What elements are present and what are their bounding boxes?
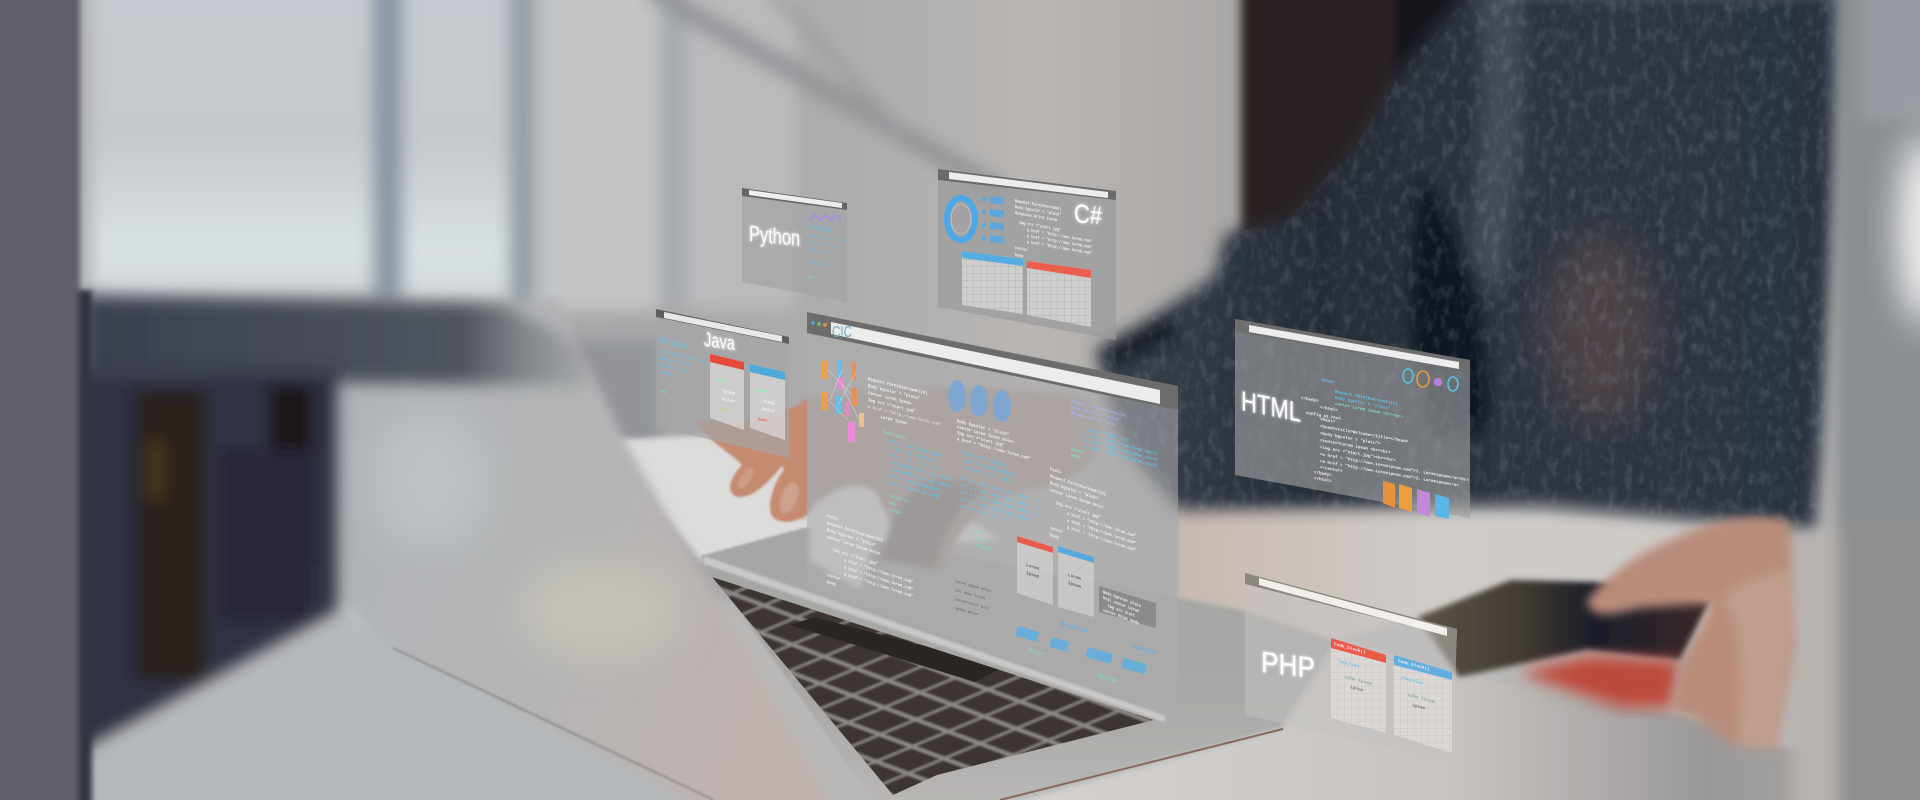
code block green: run(); <box>975 536 990 545</box>
left dark window frame <box>0 0 92 800</box>
donut chart <box>947 198 975 240</box>
right hand <box>1587 517 1795 750</box>
red card: echo lorem <box>1345 674 1372 687</box>
small code block grey: consectetur elit <box>955 597 989 612</box>
red card <box>1331 638 1386 733</box>
sweater <box>1090 0 1850 540</box>
table surface front <box>1000 640 1830 800</box>
red card: Amet <box>720 408 730 414</box>
small code block grey: Lorem ipsum dolor <box>955 579 992 594</box>
bottom labels: Research <box>1058 620 1088 635</box>
note box <box>1099 586 1156 628</box>
code block white bottom left: a href = "http://www.lorem.com" <box>844 558 913 586</box>
code snippet: end <box>808 275 814 281</box>
red table card <box>1027 261 1091 327</box>
code: <a href = "http://www.Loremipsum.com">1. Loremipsum</a><br> <box>1320 452 1469 483</box>
file icons <box>1383 481 1449 519</box>
code block top left <box>868 377 942 435</box>
C# label: C# <box>1074 198 1102 231</box>
code block white bottom left: body <box>827 580 836 588</box>
address bar <box>831 322 1160 404</box>
browser bar <box>1245 573 1457 638</box>
code snippet: String s = new <box>660 363 689 375</box>
red table card: Lorem <box>1026 562 1039 572</box>
code snippet <box>808 223 849 287</box>
window and wall background <box>0 0 1300 640</box>
small code block grey: sit amet lorem <box>955 588 986 602</box>
code block cyan center: var a = new Lorem(item, value, n) <box>960 476 1038 504</box>
code snippet: for item in list: <box>808 240 843 251</box>
right bright glow <box>1899 135 1920 325</box>
code snippet: print(item) <box>808 247 830 256</box>
red table card <box>1017 536 1053 605</box>
blue card: function <box>1402 675 1423 687</box>
note box: Img src start <box>1108 605 1136 619</box>
table surface right <box>1178 500 1800 640</box>
code block violet: center <box>1071 448 1085 456</box>
address text: CIC <box>832 324 852 341</box>
laptop lid <box>337 296 838 800</box>
red card: ipsum <box>1350 684 1363 694</box>
right foreground blur <box>1792 0 1920 800</box>
bottom edge line of lid <box>393 648 714 800</box>
code block violet <box>1071 399 1158 482</box>
code block cyan center: var b = new Lorem(item, value, n) <box>960 483 1038 511</box>
code block white bottom left: Request.Form(Username)[0] <box>827 521 883 544</box>
code block white bottom left: a href = "http://www.lorem.com" <box>844 565 913 593</box>
cyan code: Request.Form(Username)[0] <box>1335 390 1398 407</box>
code snippet: public void run() <box>660 356 695 369</box>
red card: Code_block() <box>1334 641 1366 656</box>
laptop front edge <box>1000 729 1283 800</box>
code block cyan center: print("lorem", name) <box>965 466 1013 485</box>
code block white right: a href = "http://www.lorem.com" <box>1067 511 1136 540</box>
blue card: Ipsum <box>762 398 775 407</box>
code block cyan left: item.pop(value, key, name) <box>888 466 950 489</box>
blue table card: Lorem <box>1068 572 1081 582</box>
code block green: stop(); <box>975 543 992 553</box>
code block white bottom left <box>827 514 913 613</box>
code block center: center Lorem Ipsum dolor <box>957 425 1014 445</box>
code block cyan left: for (i = 0; i < n; i++) <box>888 452 943 473</box>
code block violet: img src ="start.jpg" <box>1085 426 1129 444</box>
code: </body> <box>1314 470 1332 478</box>
code block cyan left <box>883 430 952 531</box>
code: <head><title>Welcome</title></head> <box>1320 424 1409 445</box>
blue table card <box>1058 546 1094 617</box>
small code block grey: ipsum dolor <box>955 606 979 618</box>
code block white right: center Lorem Ipsum dolor <box>1050 488 1104 511</box>
code block green <box>970 527 992 553</box>
hazy lid reflections <box>370 410 680 660</box>
code block: Request.Form(Username) <box>1015 199 1061 212</box>
code block: Img src ="start.jpg" <box>1019 220 1061 233</box>
code block violet: a href = "http://www.lorem.com/2" <box>1085 438 1158 464</box>
code block cyan center: var c = new Lorem(item, value, n) <box>960 490 1038 518</box>
sweater texture <box>1090 0 1850 540</box>
blue card: Code_block() <box>1398 658 1430 673</box>
code snippet: class Main extends App <box>660 349 706 365</box>
flow chart <box>821 360 864 442</box>
blue card: Dolor <box>762 406 775 415</box>
red card: Dolor <box>722 396 735 405</box>
code block cyan left: var b = Lorem.ipsum(a) <box>888 473 941 494</box>
browser bar <box>742 188 847 210</box>
small code block grey <box>955 579 992 621</box>
dark background behind person <box>1241 0 1501 280</box>
code block top left: Center Lorem Ipsum <box>868 391 911 407</box>
blue card <box>750 364 785 440</box>
code block violet: Response.Write Lorem <box>1071 411 1116 428</box>
blue card <box>1394 655 1452 753</box>
code block white bottom left: a href = "http://www.lorem.com" <box>844 572 913 600</box>
code block violet: Request.Form(Username)[0] <box>1071 399 1127 419</box>
red card <box>710 354 744 430</box>
code block green: if (x) <box>970 527 984 536</box>
code: <body bgcolor = "plain"> <box>1320 431 1381 447</box>
bookshelf <box>70 370 337 755</box>
code block: Response.Write Lorem <box>1015 211 1058 224</box>
panel: C# window <box>938 169 1116 340</box>
code: <html> <box>1320 417 1336 425</box>
code block white right: Img src ="start.jpg" <box>1056 501 1101 521</box>
cyan code <box>1322 378 1403 420</box>
blue card: Lorem <box>755 388 768 395</box>
hand seen through the main panel <box>800 387 1100 590</box>
note box: center dolor body <box>1103 608 1139 627</box>
panel: Python window <box>742 188 849 302</box>
left hand fingers <box>696 400 808 522</box>
red card: function <box>1338 658 1359 670</box>
code block cyan left: return c; <box>888 493 910 505</box>
code block <box>1015 199 1092 272</box>
code block white right: body <box>1050 533 1059 541</box>
sweater reddish patch <box>1545 235 1655 425</box>
laptop hinge edge <box>704 556 1166 722</box>
code snippet: return value <box>808 260 833 269</box>
red phone reflection <box>1518 655 1680 708</box>
browser bar <box>807 312 1178 410</box>
PHP label: PHP <box>1261 646 1315 685</box>
code snippet: Scripts() <box>808 223 835 235</box>
cyan code: head> <box>1322 378 1335 386</box>
bottom labels <box>1015 620 1158 685</box>
code snippet: import module as run <box>808 233 849 245</box>
code block: center <box>1015 246 1028 254</box>
code block white right: Request.Form(Username)[0] <box>1050 474 1106 498</box>
panel: HTML window <box>1235 319 1470 519</box>
code block violet: body <box>1071 453 1080 461</box>
code block: a href = "http://www.lorem.com" <box>1027 240 1092 257</box>
code block center <box>957 419 1031 462</box>
code block white right: Body bgcolor = "plain" <box>1050 481 1099 502</box>
red table card: Ipsum <box>1026 570 1039 580</box>
code block white bottom left: center <box>827 574 841 583</box>
code block cyan left: item.push(value, key, name) <box>888 459 952 483</box>
code block cyan left: if (a > 0) return a; <box>888 445 936 464</box>
panel: main code window <box>807 312 1178 718</box>
code block: Body bgcolor = "plain" <box>1015 205 1061 218</box>
bottom labels: Design <box>1096 672 1120 685</box>
red card: Ipsum <box>722 388 735 397</box>
keyboard <box>712 577 1154 795</box>
html label: HTML <box>1241 384 1301 428</box>
code block: body <box>1015 253 1024 260</box>
java label: Java <box>704 329 736 355</box>
code block center: Img src ="start.jpg" <box>957 431 1005 449</box>
code snippet <box>660 337 706 405</box>
lower-left table <box>60 620 800 800</box>
code block cyan center: var d = new Lorem(item, value) <box>960 497 1031 523</box>
traffic lights <box>811 321 827 327</box>
code block white bottom left: Img src ="start.jpg" <box>833 548 878 567</box>
code block cyan left: var a = new Lorem(item) <box>888 438 943 459</box>
code: config p1.html <box>1306 411 1342 422</box>
red card: Lorem <box>715 378 728 385</box>
laptop deck <box>700 527 1335 800</box>
table under the keyboard area <box>600 430 1000 560</box>
blue card: echo lorem <box>1408 692 1435 705</box>
code block top left: Request.Form(Username)[0] <box>868 377 927 397</box>
bottom labels: Start <box>1027 647 1047 659</box>
panel: Java window <box>656 309 789 458</box>
code block cyan left: close <box>888 507 901 516</box>
cyan code: center Lorem ipsum <br><br> <box>1335 402 1403 420</box>
code: </body> <box>1301 396 1319 404</box>
code block cyan center <box>960 450 1038 532</box>
note box: Body bgcolor plain <box>1103 590 1141 610</box>
code block top left: a href = "http://www.lorem.com" <box>868 405 942 428</box>
code block top left: Body bgcolor = "plain" <box>868 384 921 402</box>
three blue ovals <box>948 380 1011 422</box>
cyan code: Body bgcolor = "plain" <box>1335 396 1391 412</box>
flow icons <box>1403 369 1458 391</box>
code block white right: a href = "http://www.lorem.com" <box>1067 525 1136 554</box>
code block center: a href = "http://www.lorem.com" <box>957 437 1031 462</box>
browser bar <box>938 169 1116 200</box>
code block cyan left: Function() <box>883 430 907 442</box>
purple wave chart <box>809 215 841 220</box>
code block cyan left: end <box>888 500 896 508</box>
blue card: Amet <box>758 418 768 424</box>
code block violet: a href = "http://www.lorem.com/1" <box>1085 432 1158 458</box>
code snippet: Scripts <box>660 337 689 352</box>
code block top left: Img src ="start.jpg" <box>868 398 916 415</box>
code block white right <box>1050 467 1136 567</box>
code block: a href = "http://www.lorem.com" <box>1027 234 1092 251</box>
code block: a href = "http://www.lorem.com" <box>1027 228 1092 245</box>
blue card: ipsum <box>1412 702 1425 712</box>
code block white right: center <box>1050 527 1064 536</box>
bottom labels: Develop <box>1131 643 1158 657</box>
code: </center> <box>1320 465 1343 474</box>
code block cyan center: class Lorem extends <box>960 450 1005 469</box>
code block white bottom left: html> <box>827 514 839 523</box>
touch bar <box>790 617 1004 682</box>
python label: Python <box>749 221 800 251</box>
code block white bottom left: Body bgcolor = "plain" <box>827 528 876 549</box>
code block white right: html> <box>1050 467 1062 476</box>
note box: html center Lorem <box>1103 596 1139 615</box>
panel: PHP window <box>1245 573 1457 763</box>
code block violet: a href = "http://www.lorem.com/3" <box>1085 444 1158 470</box>
code block cyan center: return a + b + c + d; <box>960 504 1010 524</box>
legend list <box>982 195 1004 244</box>
code block white bottom left: center Lorem Ipsum dolor <box>827 535 881 557</box>
code block top left: Lorem Ipsum <box>881 415 907 427</box>
code block center: Body bgcolor = "plain" <box>957 419 1010 438</box>
code: </html> <box>1314 476 1332 484</box>
code snippet: end <box>660 389 666 396</box>
code <box>1301 396 1469 508</box>
blue table card <box>962 251 1023 314</box>
code block violet: Body bgcolor = "plain" <box>1071 405 1120 423</box>
code block cyan center: public function(item) <box>965 459 1015 479</box>
code snippet: return s; <box>660 371 678 379</box>
code: </html> <box>1320 405 1338 413</box>
code: <a href = "http://www.Loremipsum.com">2. Loremipsum</a> <box>1320 459 1459 489</box>
phone <box>1418 580 1711 677</box>
browser bar <box>1235 319 1470 371</box>
code block cyan left: var c = Lorem.dolor(b) <box>888 480 941 501</box>
code: <img src ="start.jpg"><br><br> <box>1320 445 1396 464</box>
code: <center>Lorem ipsum <br><br> <box>1320 438 1391 456</box>
window sill band <box>85 296 590 385</box>
blue table card: Ipsum <box>1068 580 1081 590</box>
code block white right: a href = "http://www.lorem.com" <box>1067 518 1136 547</box>
browser bar <box>656 309 789 344</box>
